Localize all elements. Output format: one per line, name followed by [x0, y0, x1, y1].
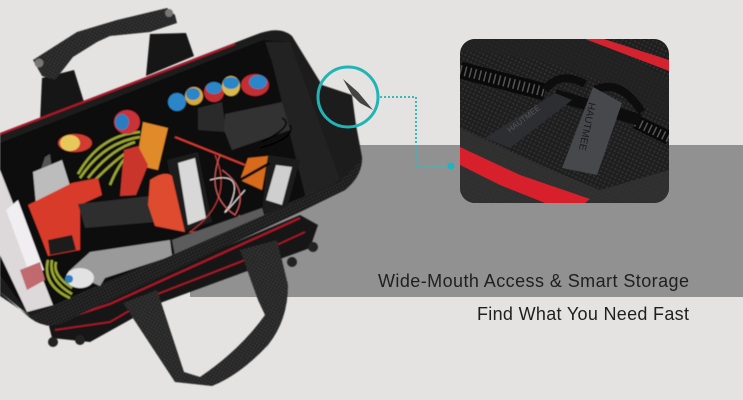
caption: [378, 271, 689, 324]
bag contents: [0, 74, 300, 312]
bag body: [0, 30, 362, 325]
right zipper pull: [562, 87, 622, 175]
wire coils: [47, 132, 140, 298]
bottom handle: [123, 240, 288, 386]
callout circle: [318, 67, 378, 127]
caption line 1: Wide-Mouth Access & Smart Storage: [378, 271, 689, 291]
red piping: [0, 44, 300, 325]
side gusset: [265, 42, 340, 203]
tangled wires: [175, 137, 270, 232]
bag interior: [0, 40, 340, 312]
grey band: [190, 145, 743, 297]
impact drill: [28, 154, 185, 256]
upper panel: [460, 39, 669, 120]
right zipper pull: HAUTMEE: [576, 101, 597, 152]
teeth detail: [460, 70, 545, 92]
caption line 2: Find What You Need Fast: [477, 304, 689, 324]
batteries: [167, 152, 300, 232]
left zipper pull: [485, 93, 572, 148]
bottom red stripe: [460, 147, 590, 203]
left zipper teeth: [460, 70, 545, 92]
left zipper pull: HAUTMEE: [506, 103, 542, 135]
front rim: [0, 160, 361, 326]
top handle: [33, 8, 194, 122]
red cutters: [120, 146, 148, 196]
chargers: [198, 102, 291, 150]
lower pocket and feet: [48, 215, 318, 347]
zipper tag: [343, 79, 373, 110]
zipper sliders: [545, 78, 642, 120]
lower trim: [460, 128, 669, 203]
orange tester: [136, 122, 168, 170]
top red stripe: [585, 39, 669, 71]
fabric base: [460, 39, 669, 203]
parts box: [0, 170, 53, 312]
screwdriver handles: [58, 74, 269, 152]
dotted connector: [380, 97, 454, 170]
zipper close-up photo: [460, 39, 669, 203]
right zipper teeth: [636, 122, 669, 138]
bag photo: [0, 8, 362, 386]
flashlight: [65, 208, 265, 288]
right teeth detail: [636, 122, 669, 138]
